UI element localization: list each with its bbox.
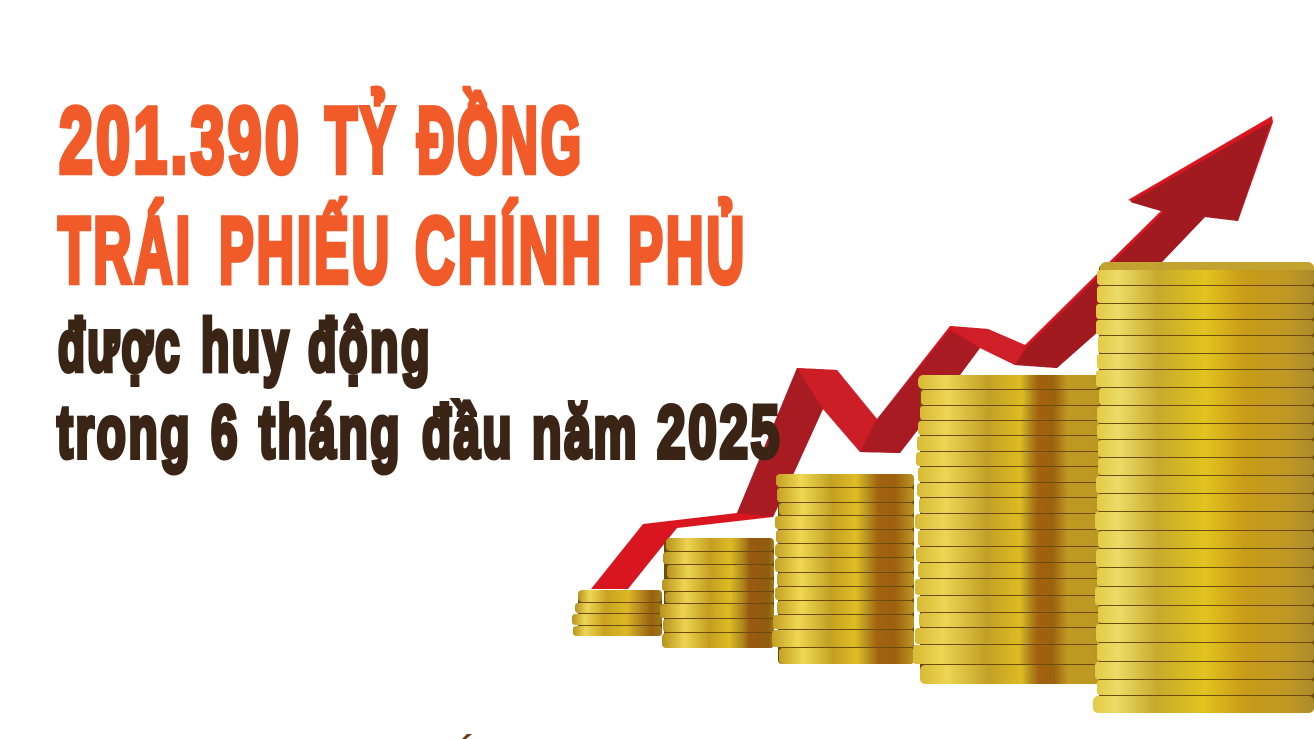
subtitle line 1: huy xyxy=(201,304,291,387)
subtitle line 1: được xyxy=(58,304,182,387)
coin stack 1 xyxy=(572,590,662,636)
red rising arrow xyxy=(591,116,1273,589)
headline line 1: 201.390 xyxy=(59,88,302,192)
subtitle line 2: 2025 xyxy=(657,390,782,474)
headline line 2: TRÁI xyxy=(58,198,193,302)
subtitle line 2: 6 xyxy=(211,390,240,474)
headline line 2: CHÍNH xyxy=(415,198,604,302)
subtitle line 1: động xyxy=(308,304,432,387)
cropped accent at bottom edge xyxy=(462,734,472,739)
subtitle line 2 xyxy=(57,390,782,474)
coin stack 2 xyxy=(660,538,774,648)
subtitle line 2: trong xyxy=(57,390,192,474)
subtitle line 2: năm xyxy=(532,390,639,474)
headline line 1: TỶ xyxy=(325,88,398,192)
coin stack 5 xyxy=(1093,262,1314,713)
subtitle line 2: đầu xyxy=(422,390,514,474)
coin stack 4 xyxy=(913,375,1102,684)
subtitle line 2: tháng xyxy=(259,390,402,474)
coin stack 3 xyxy=(772,474,914,664)
headline line 2 xyxy=(58,198,747,302)
headline line 2: PHIẾU xyxy=(219,198,392,302)
subtitle line 1 xyxy=(58,304,432,387)
headline line 2: PHỦ xyxy=(628,198,747,302)
headline line 1: ĐỒNG xyxy=(417,88,584,192)
title xyxy=(57,88,782,474)
